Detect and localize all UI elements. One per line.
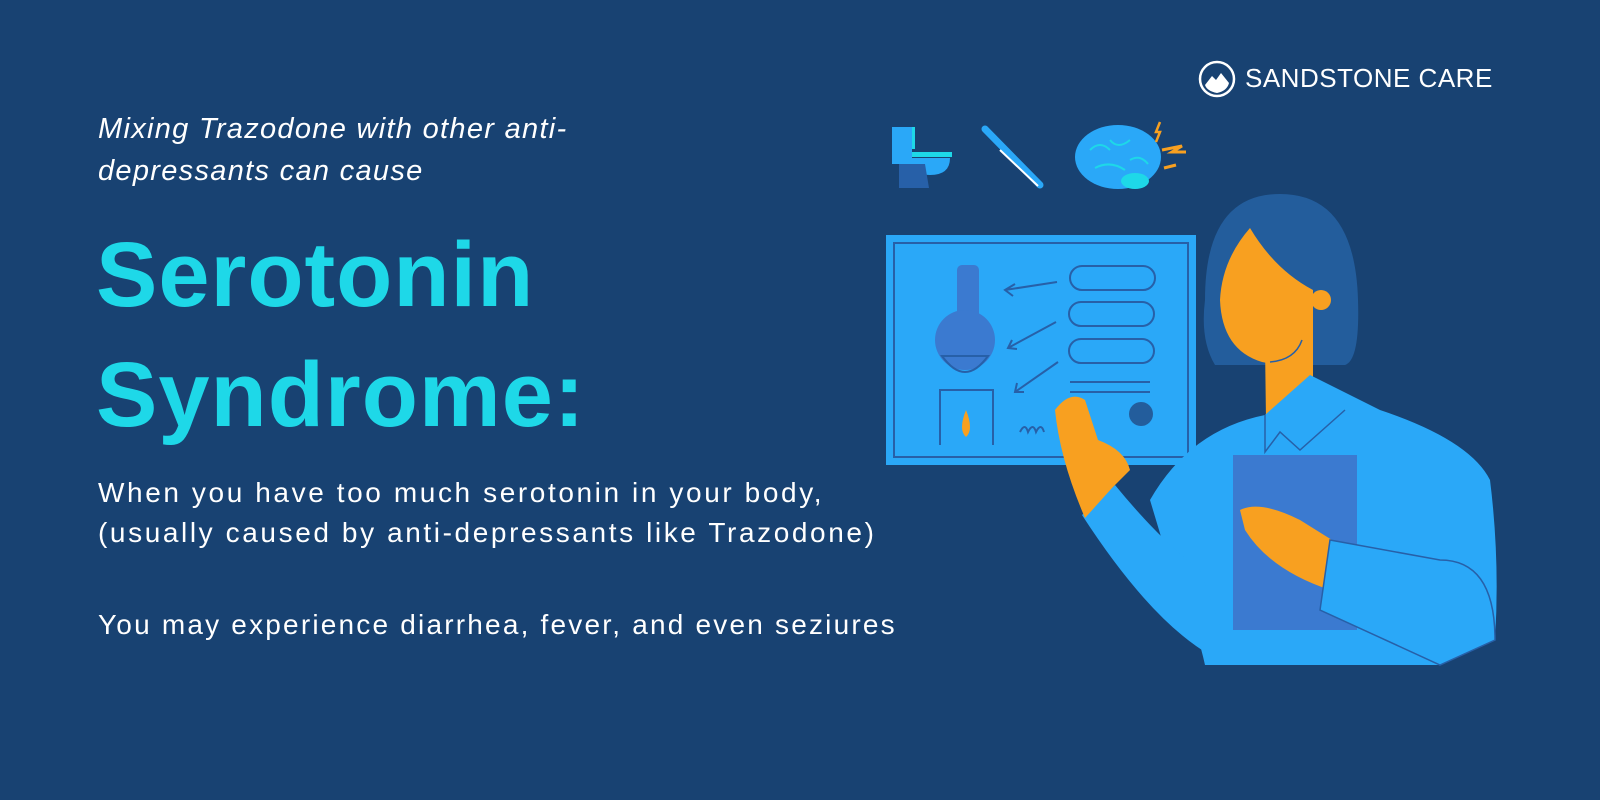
title: Syndrome: (96, 344, 586, 446)
icon: brain (1075, 122, 1186, 189)
icon: thermometer (985, 129, 1040, 186)
title (96, 224, 586, 446)
body text: When you have too much serotonin in your body, (98, 477, 824, 508)
intro text: depressants can cause (98, 155, 424, 187)
logo: SANDSTONE CARE (1245, 63, 1493, 93)
neck (1265, 345, 1313, 420)
clipboard (1233, 455, 1357, 630)
logo (1198, 60, 1493, 98)
body text: You may experience diarrhea, fever, and even seziures (98, 609, 897, 640)
intro text (98, 113, 568, 187)
face (1220, 228, 1313, 364)
title: Serotonin (96, 224, 534, 326)
shirt body (1150, 375, 1497, 665)
holding hand (1240, 507, 1340, 590)
raised hand (1055, 397, 1130, 518)
hair (1204, 194, 1358, 365)
raised arm (1082, 485, 1225, 655)
icon: toilet (892, 127, 952, 188)
intro text: Mixing Trazodone with other anti- (98, 113, 568, 145)
sleeve (1320, 540, 1495, 665)
presentation board (886, 235, 1196, 465)
body text (98, 477, 897, 640)
body text: (usually caused by anti-depressants like Trazodone) (98, 517, 876, 548)
